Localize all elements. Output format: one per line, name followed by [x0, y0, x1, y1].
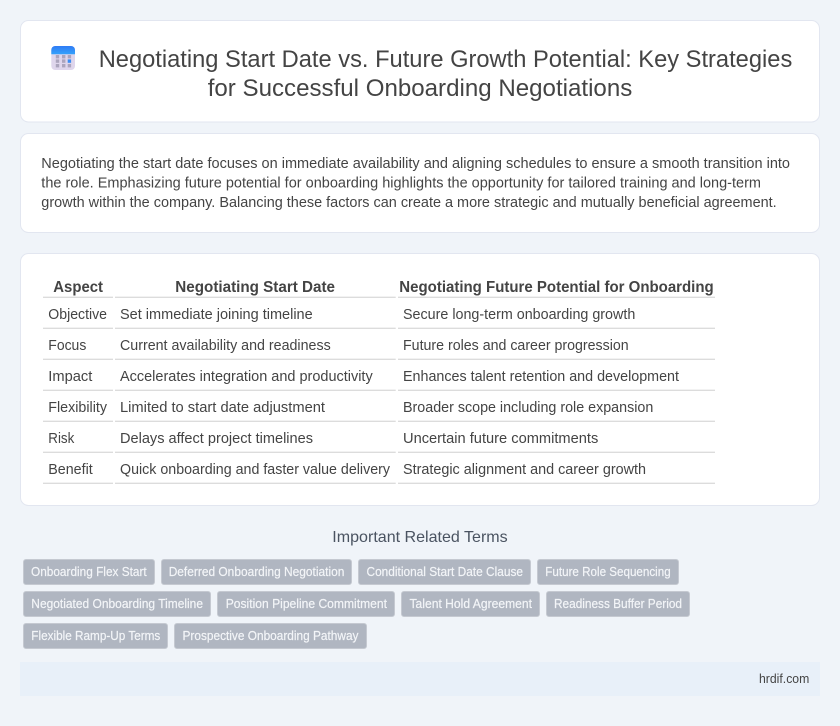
table row: risk	[43, 431, 715, 452]
tag	[358, 560, 530, 584]
tag: Deferred Onboarding Negotiation	[169, 564, 344, 579]
table row: benefit: Strategic alignment and career growth	[403, 462, 646, 478]
table row: risk: Risk	[48, 431, 75, 447]
text block: description: Negotiating the start date focuses on immediate availability and aligning schedules to ensure a smooth transition into	[41, 155, 790, 172]
panel: header	[20, 20, 820, 122]
tag: Talent Hold Agreement	[410, 596, 532, 611]
tag	[24, 560, 154, 584]
table row: risk: Uncertain future commitments	[403, 431, 598, 447]
tag: Position Pipeline Commitment	[226, 596, 387, 611]
tag	[218, 592, 394, 616]
table row: risk: Delays affect project timelines	[120, 431, 313, 447]
table header	[43, 279, 715, 297]
table row: impact: Enhances talent retention and development	[403, 369, 679, 385]
text block: description: growth within the company. Balancing these factors can create a more strategic and mutually beneficial agreement.	[41, 194, 777, 211]
table row: impact	[43, 369, 715, 390]
tag	[538, 560, 678, 584]
table header: Negotiating Start Date	[175, 279, 335, 296]
tag	[24, 624, 168, 648]
tag	[162, 560, 352, 584]
tag: Readiness Buffer Period	[554, 596, 682, 611]
table row: focus	[43, 338, 715, 359]
panel: description	[20, 134, 820, 232]
tag: Prospective Onboarding Pathway	[182, 628, 359, 643]
icon: calendar	[51, 46, 75, 70]
table header: Negotiating Future Potential for Onboarding	[399, 279, 714, 296]
tag	[24, 592, 210, 616]
table row: focus: Focus	[48, 338, 86, 354]
table row: flexibility: Limited to start date adjustment	[120, 400, 325, 416]
tag	[174, 624, 366, 648]
tag: Conditional Start Date Clause	[366, 564, 523, 579]
panel: comparison table	[20, 254, 820, 506]
title: Negotiating Start Date vs. Future Growth Potential: Key Strategies	[99, 46, 792, 73]
table row: objective: Objective	[48, 307, 107, 323]
table row: focus: Future roles and career progression	[403, 338, 629, 354]
footer: hrdif.com	[759, 671, 809, 686]
tag: Negotiated Onboarding Timeline	[31, 596, 203, 611]
table header: Aspect	[53, 279, 104, 296]
text block: description	[41, 155, 790, 211]
table row: objective	[43, 307, 715, 328]
table row: benefit: Benefit	[48, 462, 93, 478]
table row: impact: Accelerates integration and productivity	[120, 369, 373, 385]
table row: objective: Set immediate joining timeline	[120, 307, 313, 323]
text block: description: the role. Emphasizing future potential for onboarding highlights the opportunity for tailored training and long-term	[41, 174, 761, 192]
tag	[402, 592, 540, 616]
table row: objective: Secure long-term onboarding growth	[403, 307, 635, 323]
tag: Future Role Sequencing	[545, 564, 671, 579]
title	[99, 46, 792, 102]
table row: flexibility: Flexibility	[48, 400, 108, 416]
table row: flexibility	[43, 400, 715, 421]
tag: Flexible Ramp-Up Terms	[31, 628, 161, 643]
table row: flexibility: Broader scope including role expansion	[403, 400, 653, 416]
heading: related terms: Important Related Terms	[332, 529, 508, 546]
related terms tags	[24, 560, 690, 648]
table row: benefit: Quick onboarding and faster value delivery	[120, 462, 391, 478]
table row: focus: Current availability and readiness	[120, 338, 331, 354]
table row: benefit	[43, 462, 715, 483]
table row: impact: Impact	[48, 369, 92, 385]
tag: Onboarding Flex Start	[31, 564, 147, 579]
title: for Successful Onboarding Negotiations	[208, 75, 632, 102]
tag	[546, 592, 690, 616]
footer	[20, 662, 820, 696]
